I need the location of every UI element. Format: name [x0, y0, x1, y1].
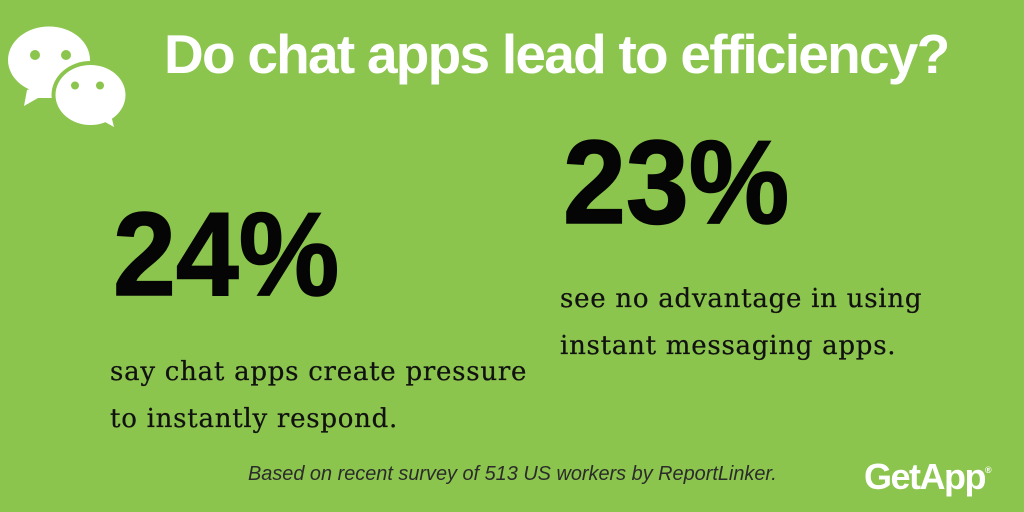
- source note: Based on recent survey of 513 US workers by ReportLinker.: [248, 463, 777, 485]
- text: 23% description: see no advantage in using: [560, 284, 922, 314]
- statistic: 23%: 23%: [563, 116, 789, 249]
- text: 24% description: [110, 357, 527, 434]
- text: 24% description: say chat apps create pressure: [110, 357, 527, 387]
- statistic: 24%: 24%: [113, 188, 339, 321]
- text: 24% description: to instantly respond.: [110, 404, 398, 434]
- text: 23% description: instant messaging apps.: [560, 331, 896, 361]
- text: 23% description: [560, 284, 922, 361]
- title: Do chat apps lead to efficiency?: [164, 23, 948, 85]
- logo: GetApp: GetApp®: [864, 456, 992, 497]
- icon: chat bubbles: [8, 26, 126, 127]
